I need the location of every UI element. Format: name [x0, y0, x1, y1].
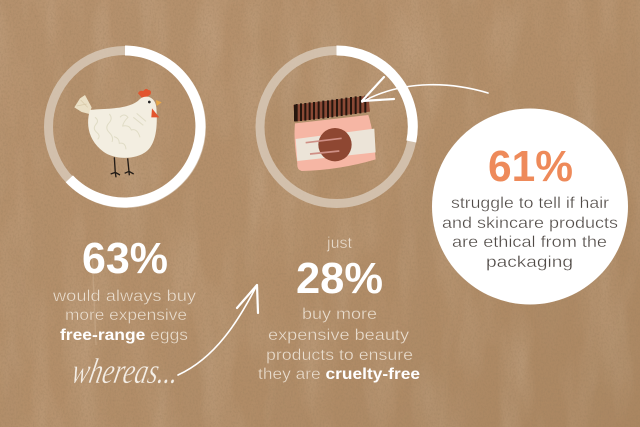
ring value 28% [336, 50, 413, 142]
arrow: whereas to 28% [178, 285, 258, 375]
callout circle [432, 108, 628, 304]
callout text [442, 195, 618, 271]
text: beauty: products to ensure [266, 347, 413, 364]
arrow: to jar [362, 77, 488, 102]
stat 61%: 61% [488, 142, 573, 191]
stat 28%: 28% [296, 254, 383, 303]
text: eggs: more expensive [65, 307, 187, 324]
panel: jar ring chart [260, 50, 413, 204]
stat 63%: 63% [82, 234, 168, 283]
ring track [260, 50, 413, 204]
callout text: struggle to tell if hair [451, 195, 610, 212]
text: beauty [258, 306, 420, 383]
icon: hen [74, 89, 162, 177]
callout text: are ethical from the [452, 234, 607, 251]
text: eggs [52, 288, 196, 344]
panel: hen ring chart [48, 50, 202, 204]
text: beauty: buy more [302, 306, 377, 323]
text: eggs: would always buy [52, 288, 196, 305]
ring track [48, 50, 202, 204]
callout text: packaging [486, 254, 573, 271]
text: just: just [326, 235, 353, 252]
text: eggs: free-range eggs [60, 327, 188, 344]
ring value 63% [69, 50, 200, 202]
callout text: and skincare products [442, 215, 618, 232]
text: beauty: expensive beauty [268, 327, 409, 344]
handwritten whereas: whereas... [68, 351, 183, 391]
panel: 61% callout [432, 108, 628, 304]
text: beauty: they are cruelty-free [258, 366, 420, 383]
icon: jar [293, 96, 376, 171]
